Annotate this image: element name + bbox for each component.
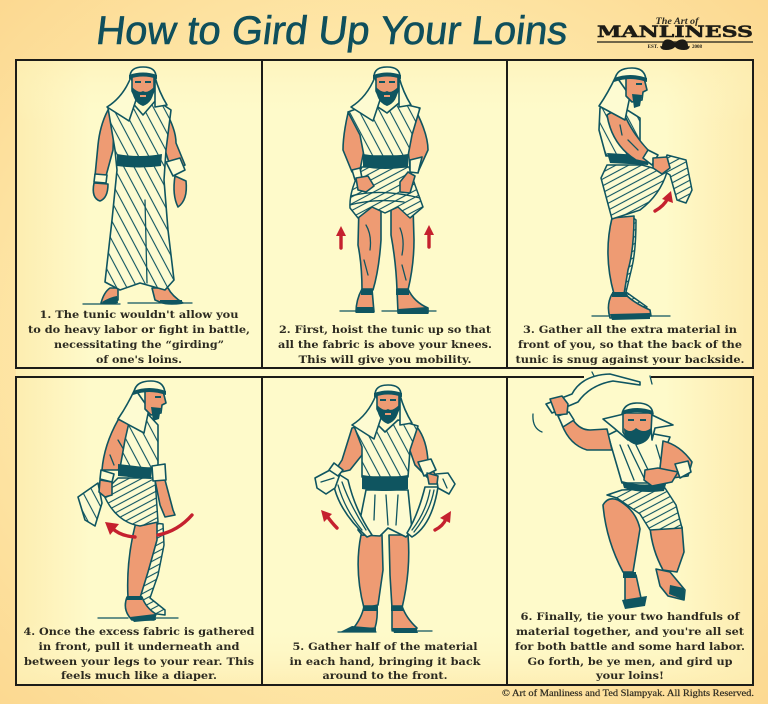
caption: step 5: around to the front. xyxy=(322,670,448,682)
arrows: outward and up xyxy=(321,510,451,530)
arrows: around the legs xyxy=(105,515,192,537)
back leg and foot xyxy=(650,527,685,600)
caption: step 6: 6. Finally, tie your two handfuls of xyxy=(520,611,741,623)
caption: step 2: all the fabric is above your knees. xyxy=(278,339,492,351)
caption: step 6: for both battle and some hard labor. xyxy=(515,641,745,653)
logo: The Art of Manliness: The Art of xyxy=(656,17,699,27)
illustration: man in full tunic xyxy=(83,67,192,305)
caption: step 6: material together, and you're all set xyxy=(516,626,744,638)
caption: step 1 xyxy=(28,309,250,366)
front leg and foot xyxy=(603,499,647,609)
arrows: up xyxy=(336,225,434,248)
caption: step 6 xyxy=(515,611,745,682)
caption: step 1: necessitating the “girding” xyxy=(54,339,224,351)
caption: step 6: your loins! xyxy=(595,670,664,682)
caption: step 2: This will give you mobility. xyxy=(298,354,472,366)
head with cloth wings xyxy=(603,403,673,445)
caption: step 4: between your legs to your rear. This xyxy=(24,656,254,668)
caption: step 1: 1. The tunic wouldn't allow you xyxy=(40,309,239,321)
illustration: man leaping with sword xyxy=(533,372,692,609)
caption: step 3: tunic is snug against your backside. xyxy=(516,354,744,366)
caption: step 5: 5. Gather half of the material xyxy=(292,641,478,653)
panel: top row frame xyxy=(16,60,753,368)
arrow: curved up xyxy=(655,191,673,211)
caption: step 2: 2. First, hoist the tunic up so that xyxy=(279,324,491,336)
caption: step 6: Go forth, be ye men, and gird up xyxy=(528,656,732,668)
title: How to Gird Up Your Loins xyxy=(94,8,570,53)
caption: step 5: in each hand, bringing it back xyxy=(290,656,481,668)
illustration: man pulling fabric between legs xyxy=(78,381,192,622)
logo: The Art of Manliness: 2008 xyxy=(692,45,702,50)
right arm and fist xyxy=(644,441,692,486)
raised arm and sword xyxy=(546,374,640,450)
caption: step 3 xyxy=(516,324,744,366)
caption: step 4: in front, pull it underneath and xyxy=(38,641,240,653)
caption: step 5 xyxy=(290,641,481,682)
caption: step 3: front of you, so that the back of the xyxy=(518,339,742,351)
caption: step 4: 4. Once the excess fabric is gathered xyxy=(24,626,255,638)
caption: step 3: 3. Gather all the extra material in xyxy=(523,324,737,336)
copyright: © Art of Manliness and Ted Slampyak. All Rights Reserved. xyxy=(502,688,754,699)
illustration: man gathering fabric in side view xyxy=(592,68,692,320)
caption: step 4: feels much like a diaper. xyxy=(61,670,217,682)
caption: step 2 xyxy=(278,324,492,366)
logo: The Art of Manliness: MANLINESS xyxy=(597,22,753,41)
logo: The Art of Manliness xyxy=(597,17,753,50)
logo: The Art of Manliness: EST. xyxy=(648,45,659,50)
caption: step 1: of one's loins. xyxy=(96,354,182,366)
illustration: man holding fabric in each hand xyxy=(315,385,455,633)
caption: step 4 xyxy=(24,626,255,682)
illustration: man hoisting tunic above knees xyxy=(336,67,436,314)
caption: step 1: to do heavy labor or fight in battle, xyxy=(28,324,250,336)
panel: bottom row frame xyxy=(16,377,753,685)
